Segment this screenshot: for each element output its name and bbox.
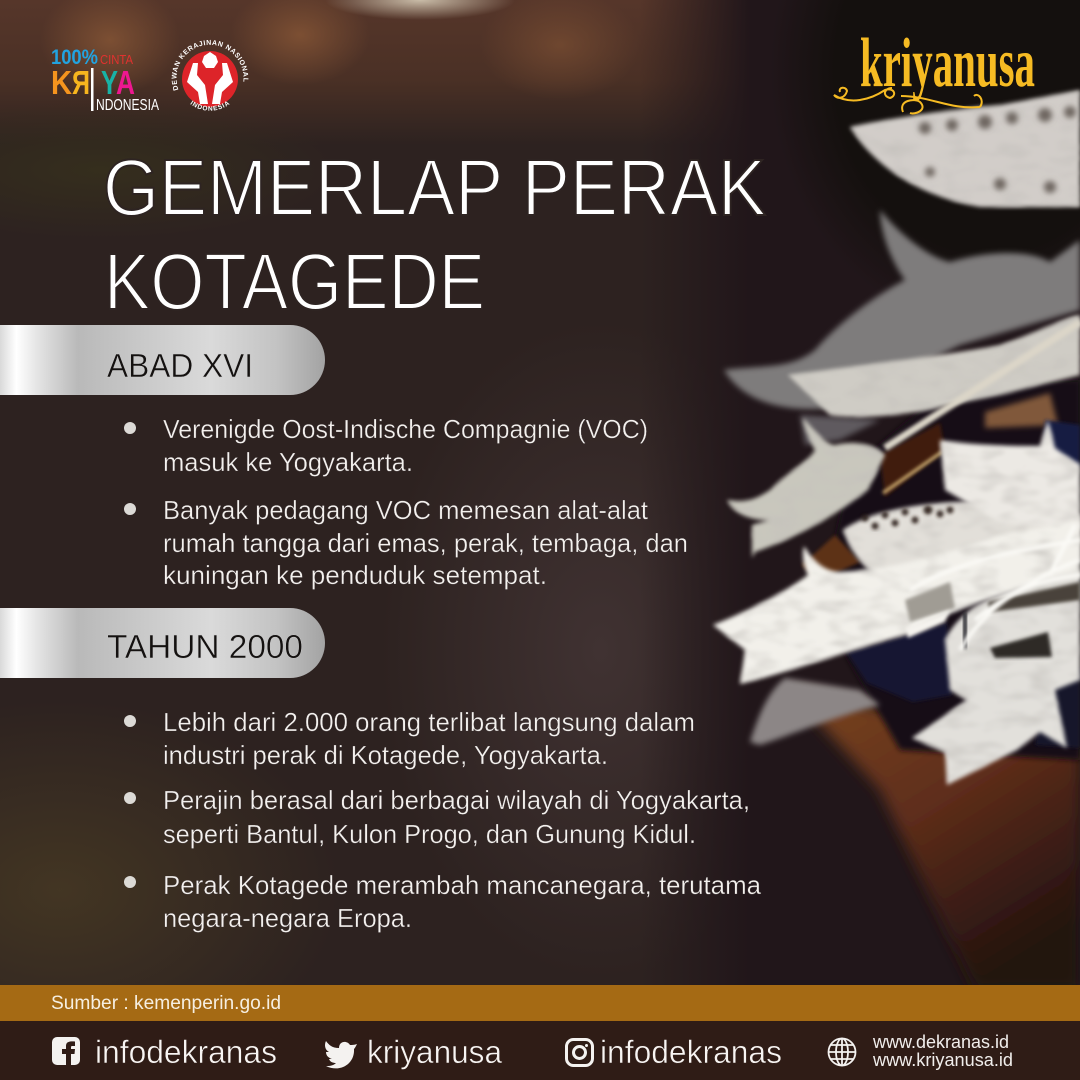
bullet list: Abad XVI: Banyak pedagang VOC memesan alat-alat [163,495,649,525]
long silver leaf fish [788,315,1080,417]
bullet list: Abad XVI: masuk ke Yogyakarta. [163,447,413,477]
icon: facebook [52,1037,80,1065]
logo: 100% Cinta Kriya Indonesia: A [116,64,135,101]
large white fish [713,520,1080,684]
section pill: Tahun 2000: TAHUN 2000 [107,628,303,665]
logo: Dewan Kerajinan Nasional Indonesia: INDONESIA [190,100,230,111]
speckled leaf fish [843,502,1080,578]
bullet list: Tahun 2000: seperti Bantul, Kulon Progo, dan Gunung Kidul. [163,819,696,849]
handle: facebook: infodekranas [95,1034,277,1070]
icon: twitter [325,1041,357,1068]
logo: 100% Cinta Kriya Indonesia: Я [72,64,90,101]
section pill: Abad XVI: ABAD XVI [107,347,253,384]
upper white fish [940,420,1080,530]
title [103,143,766,326]
handle: instagram: infodekranas [600,1034,782,1070]
website links: www.kriyanusa.id [872,1050,1013,1070]
right white fish cluster [912,570,1080,785]
logo: 100% Cinta Kriya Indonesia: K [51,64,72,101]
bullet list: Abad XVI: rumah tangga dari emas, perak, tembaga, dan [163,528,688,558]
thin cream rods [885,322,1080,448]
icon: globe [828,1038,856,1066]
bullet list: Tahun 2000: Lebih dari 2.000 orang terlibat langsung dalam [163,707,695,737]
website links: www.dekranas.id [872,1032,1009,1052]
logo: 100% Cinta Kriya Indonesia: CINTA [100,53,134,67]
social footer [0,1021,1080,1080]
handle: twitter: kriyanusa [367,1034,502,1070]
icon: instagram [566,1040,592,1066]
dark gaps behind fish [820,380,1080,760]
bullet list: Tahun 2000: Perak Kotagede merambah mancanegara, terutama [163,870,762,900]
logo: 100% Cinta Kriya Indonesia [51,46,159,114]
section pill: Abad XVI [0,325,325,395]
white filigree strands [910,525,1080,650]
logo: kriyanusa [834,25,1035,113]
bullet list: Abad XVI [124,414,688,590]
logo: 100% Cinta Kriya Indonesia: Y [101,64,118,101]
source bar [0,985,1080,1021]
bullet list: Abad XVI: Verenigde Oost-Indische Compagnie (VOC) [163,414,648,444]
bullet list: Tahun 2000: negara-negara Eropa. [163,903,412,933]
grey blurred fish [724,210,1080,409]
logo: 100% Cinta Kriya Indonesia: 100% [51,46,98,69]
bullet list: Tahun 2000 [124,707,762,933]
photo: silver filigree fish jewellery [713,90,1080,990]
website links [872,1032,1013,1070]
title: GEMERLAP PERAK [103,143,766,232]
section pill: Tahun 2000 [0,608,325,678]
logo: 100% Cinta Kriya Indonesia: NDONESIA [96,97,159,114]
bullet list: Tahun 2000: industri perak di Kotagede, Yogyakarta. [163,740,608,770]
fish left [727,418,885,558]
wooden surface [790,690,1080,990]
top silver bowl [850,90,1080,207]
source bar: Sumber : kemenperin.go.id [51,993,281,1014]
bullet list: Tahun 2000: Perajin berasal dari berbagai wilayah di Yogyakarta, [163,785,750,815]
logo: Dewan Kerajinan Nasional Indonesia: DEWAN KERAJINAN NASIONAL [172,40,248,91]
title: KOTAGEDE [104,237,485,326]
bullet list: Abad XVI: kuningan ke penduduk setempat. [163,560,547,590]
